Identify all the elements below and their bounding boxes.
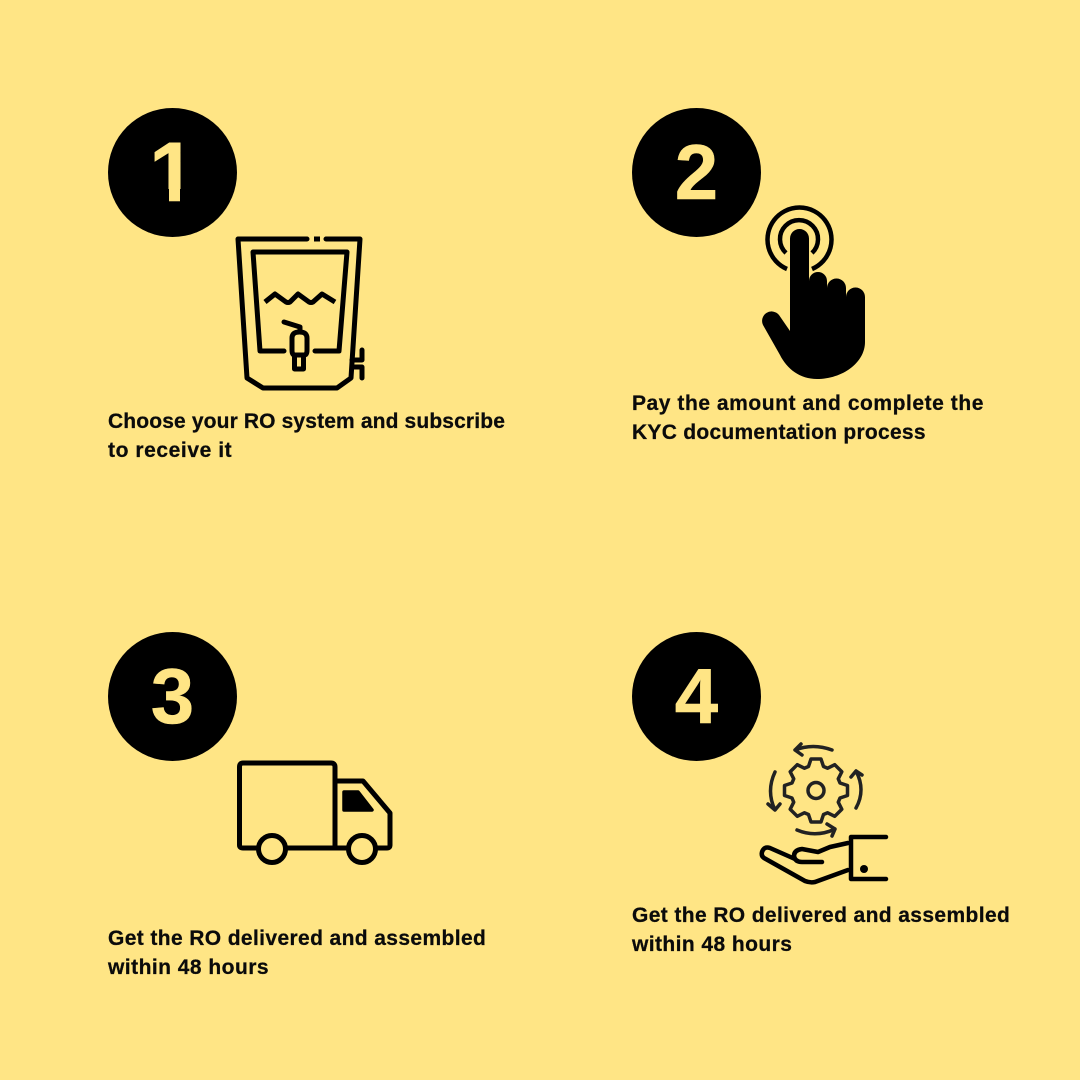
step 2 number badge (632, 108, 761, 237)
step 2 text: Pay the amount and complete the (632, 392, 984, 415)
icon: hand tapping (762, 208, 865, 379)
step 1 text (108, 410, 505, 462)
step 3 number badge: 3 (151, 652, 194, 740)
rotation arrows (795, 744, 832, 755)
step 1 text: Choose your RO system and subscribe (108, 410, 505, 433)
open hand and cuff (794, 843, 848, 862)
step 4 text: Get the RO delivered and assembled (632, 904, 1010, 927)
step 1 number badge: 1 (149, 125, 196, 219)
icon: delivery truck (240, 763, 390, 862)
step 2 number badge: 2 (675, 128, 718, 216)
gear (784, 759, 848, 822)
step 4 text (632, 904, 1010, 956)
step 3 text: within 48 hours (108, 956, 269, 979)
step 4 number badge: 4 (675, 652, 718, 740)
icon: RO water purifier (238, 239, 362, 388)
step 1 text: to receive it (108, 439, 232, 462)
step 2 text (632, 392, 984, 444)
step 4 text: within 48 hours (632, 933, 792, 956)
step 2 text: KYC documentation process (632, 421, 926, 444)
step 1 number badge (108, 108, 237, 237)
step 3 text (108, 927, 486, 979)
step 3 text: Get the RO delivered and assembled (108, 927, 486, 950)
gear hub (808, 782, 824, 798)
icon: hand holding gear (762, 744, 886, 882)
step 4 number badge (632, 632, 761, 761)
step 3 number badge (108, 632, 237, 761)
